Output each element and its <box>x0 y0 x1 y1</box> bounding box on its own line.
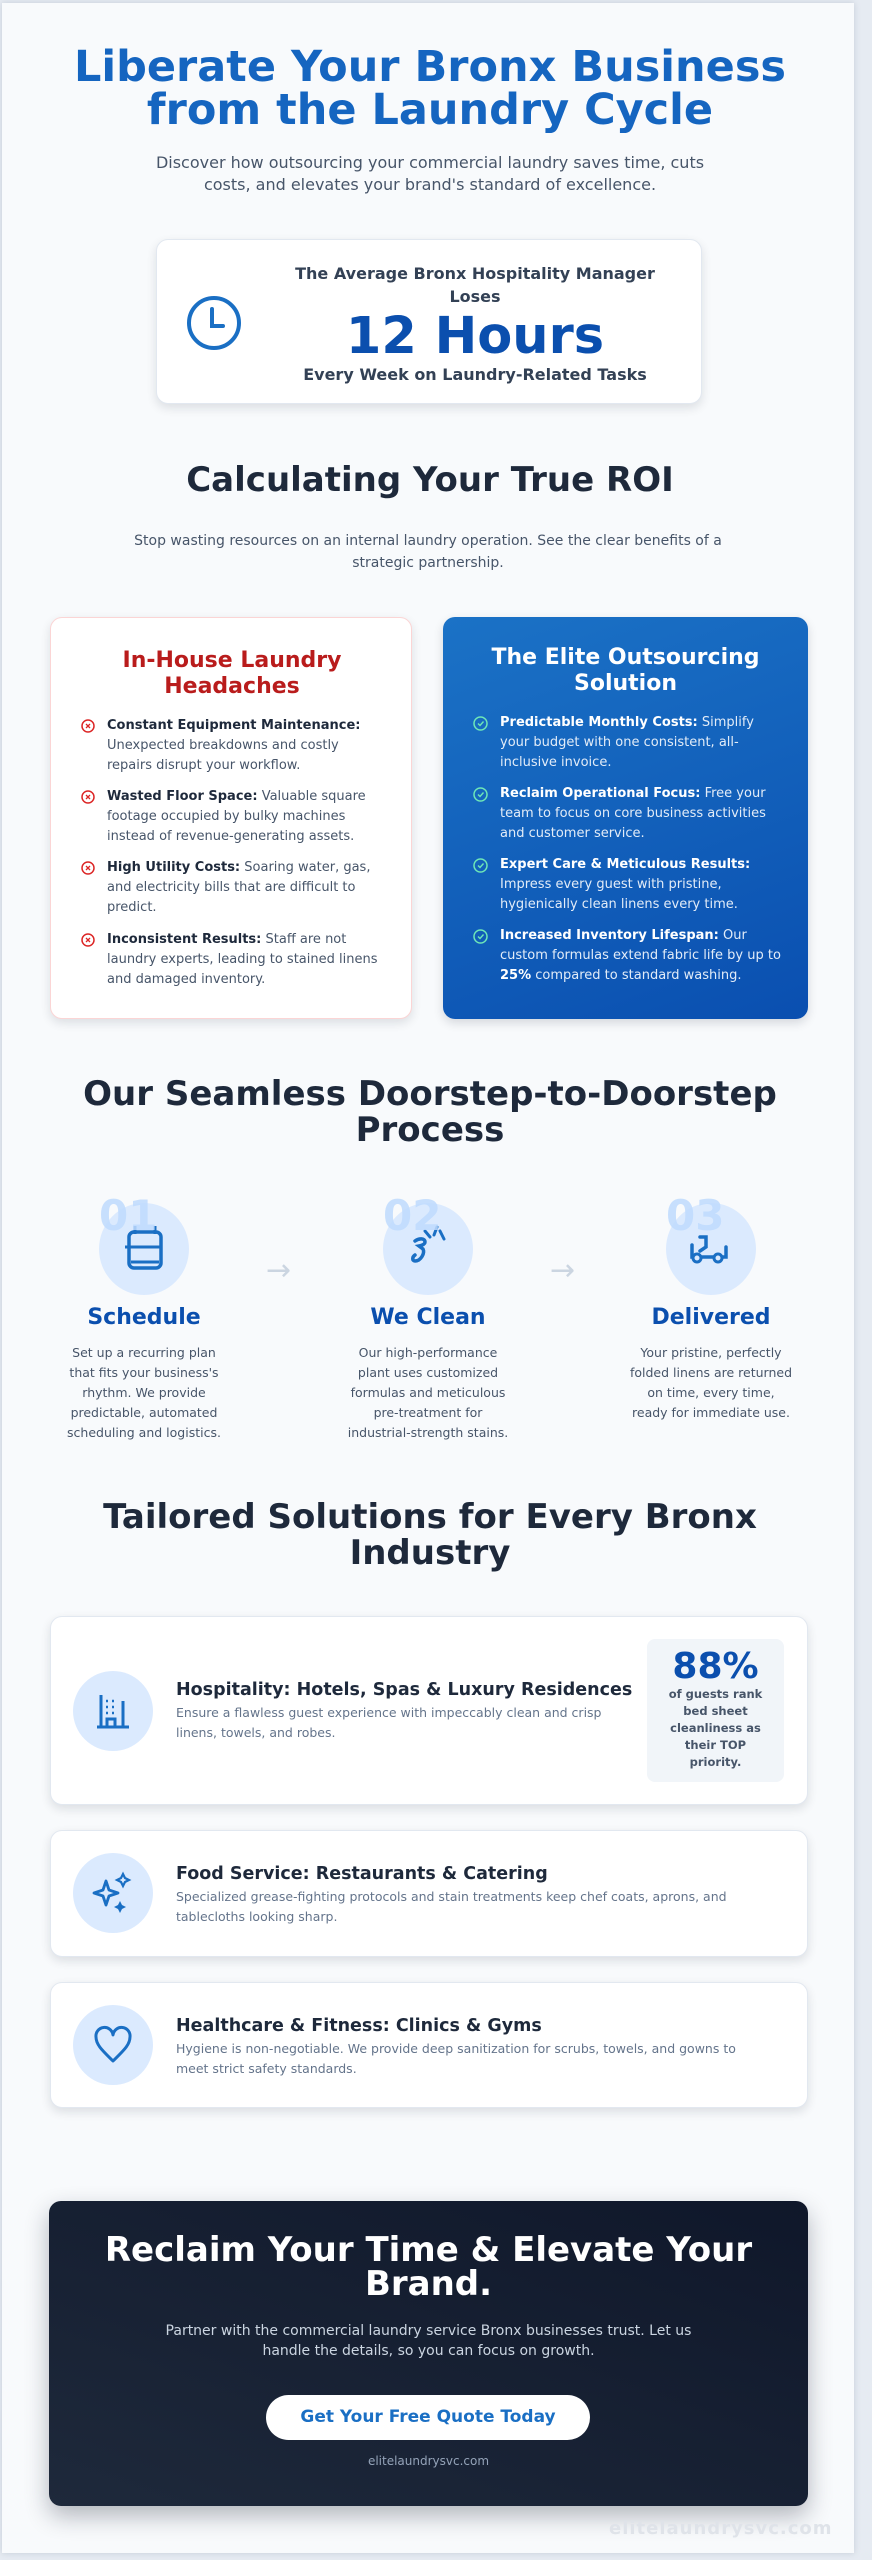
step 3: delivered: Delivered <box>651 1305 771 1330</box>
stat text: The Average Bronx Hospitality Manager Loses <box>295 264 655 306</box>
arrow: → <box>550 1253 575 1288</box>
text: Food Service: Restaurants & Catering <box>176 1864 548 1884</box>
item: focus: Reclaim Operational Focus: Free your team to focus on core business activities and customer service. <box>500 786 766 841</box>
panel title <box>491 645 760 696</box>
CTA url: elitelaundrysvc.com <box>368 2454 489 2468</box>
heading: process <box>83 1074 777 1150</box>
item: inconsistent: Inconsistent Results: Staff are not laundry experts, leading to stained linens and damaged inventory. <box>107 932 377 987</box>
panel title: Solution <box>574 671 677 696</box>
item: utility: High Utility Costs: Soaring water, gas, and electricity bills that are difficult to predict. <box>107 860 370 915</box>
stat box: 88%: of guests rank bed sheet cleanliness as their TOP priority. <box>669 1687 762 1769</box>
step 2: clean: Our high-performance plant uses customized formulas and meticulous pre-treatment for industrial-strength stains. <box>348 1345 508 1440</box>
title: Liberate Your Bronx Business <box>74 42 786 92</box>
step 1: schedule: Schedule <box>87 1305 201 1330</box>
icon: clock <box>187 296 241 350</box>
heading: ROI: Calculating Your True ROI <box>186 460 674 500</box>
step 3: delivered: Your pristine, perfectly folded linens are returned on time, every time, ready for immediate use. <box>630 1345 792 1420</box>
text: Healthcare & Fitness: Clinics & Gyms <box>176 2016 542 2036</box>
ROI subtitle: Stop wasting resources on an internal laundry operation. See the clear benefits of a strategic partnership. <box>134 533 722 571</box>
step number: 03 <box>666 1191 724 1240</box>
text <box>176 1680 632 1740</box>
text: Ensure a flawless guest experience with impeccably clean and crisp linens, towels, and robes. <box>176 1705 602 1740</box>
item: maintenance: Constant Equipment Maintenance: Unexpected breakdowns and costly repairs disrupt your workflow. <box>107 718 360 773</box>
card: food service <box>50 1830 808 1957</box>
title <box>74 42 786 135</box>
item: predictable: Predictable Monthly Costs: Simplify your budget with one consistent, all-inclusive invoice. <box>500 715 754 770</box>
step number: 02 <box>383 1191 441 1240</box>
stat box: 88%: 88% <box>672 1646 759 1687</box>
step 1: schedule: Set up a recurring plan that fits your business's rhythm. We provide predictable, automated scheduling and logistics. <box>67 1345 221 1440</box>
panel title: In-House Laundry <box>123 648 341 673</box>
step 2: clean <box>348 1191 508 1440</box>
stat card: 12 hours <box>156 239 702 404</box>
panel title <box>123 648 341 699</box>
icon: heart <box>73 2005 153 2085</box>
step 2: clean: We Clean <box>370 1305 486 1330</box>
heading: industries: Tailored Solutions for Every Bronx <box>103 1497 757 1537</box>
item: floor space: Wasted Floor Space: Valuable square footage occupied by bulky machines instead of revenue-generating assets. <box>107 789 366 844</box>
card: healthcare <box>50 1982 808 2108</box>
heading: industries: Industry <box>350 1533 510 1573</box>
icon: delivery <box>666 1203 756 1295</box>
heading: industries <box>103 1497 757 1573</box>
panel: in-house headaches <box>50 617 412 1019</box>
panel title: The Elite Outsourcing <box>491 645 760 670</box>
step 1: schedule <box>67 1191 221 1440</box>
panel: outsourcing solution <box>443 617 808 1019</box>
panel title: Headaches <box>164 674 300 699</box>
text <box>176 1864 727 1924</box>
CTA heading <box>105 2230 752 2304</box>
step number: 01 <box>99 1191 157 1240</box>
CTA button: Get Your Free Quote Today <box>300 2407 556 2427</box>
icon: sparkles <box>73 1853 153 1933</box>
stat text: Every Week on Laundry-Related Tasks <box>303 365 647 384</box>
heading: process: Our Seamless Doorstep-to-Doorstep <box>83 1074 777 1114</box>
stat text <box>295 264 655 384</box>
text: Hygiene is non-negotiable. We provide deep sanitization for scrubs, towels, and gowns to meet strict safety standards. <box>176 2041 736 2076</box>
CTA text: Partner with the commercial laundry service Bronx businesses trust. Let us handle the details, so you can focus on growth. <box>166 2323 691 2359</box>
arrow: → <box>266 1253 291 1288</box>
item: expert care: Expert Care & Meticulous Results: Impress every guest with pristine, hygienically clean linens every time. <box>500 857 750 912</box>
stat text: 12 Hours <box>346 307 604 366</box>
watermark: elitelaundrysvc.com <box>609 2518 833 2539</box>
text: Hospitality: Hotels, Spas & Luxury Residences <box>176 1680 632 1700</box>
step 3: delivered <box>630 1191 792 1420</box>
icon: clean <box>383 1203 473 1295</box>
heading: process: Process <box>356 1110 504 1150</box>
CTA heading: Reclaim Your Time & Elevate Your <box>105 2230 752 2270</box>
text: Specialized grease-fighting protocols and stain treatments keep chef coats, aprons, and tablecloths looking sharp. <box>176 1889 727 1924</box>
CTA panel <box>49 2201 808 2506</box>
icon: building <box>73 1671 153 1751</box>
title: from the Laundry Cycle <box>147 85 713 135</box>
item: lifespan: Increased Inventory Lifespan: Our custom formulas extend fabric life by up to 25% compared to standard washing. <box>500 928 781 983</box>
card: hospitality <box>50 1616 808 1805</box>
text <box>176 2016 736 2076</box>
icon: calendar <box>99 1203 189 1295</box>
CTA button <box>266 2395 590 2440</box>
subtitle: Discover how outsourcing your commercial laundry saves time, cuts costs, and elevates your brand's standard of excellence. <box>156 153 704 194</box>
stat box: 88% <box>647 1639 784 1782</box>
CTA heading: Brand. <box>365 2264 492 2304</box>
